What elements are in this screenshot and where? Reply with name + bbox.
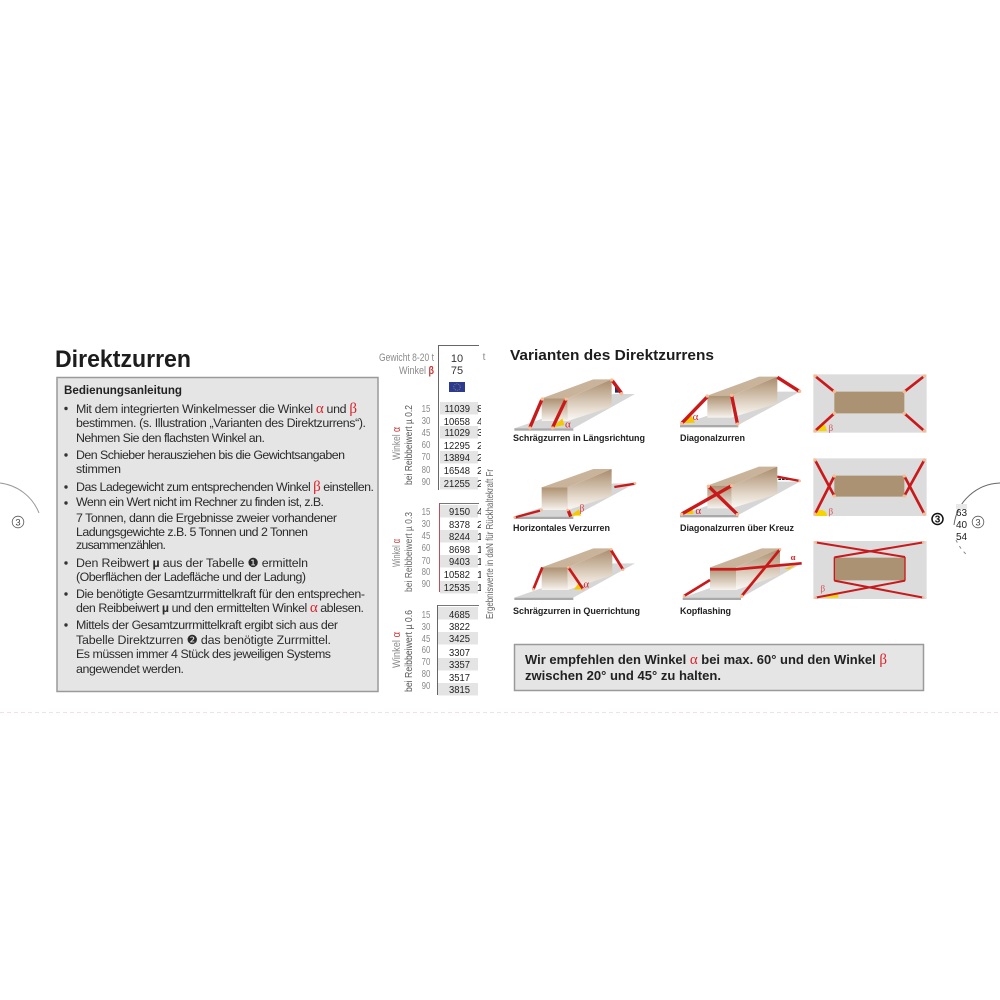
left dial edge: 3 (15, 518, 21, 528)
top view: Diagonalzurren: β (828, 424, 833, 434)
top view: Kopflashing: β (820, 585, 825, 595)
table: friction 0.2: 60 (422, 439, 430, 450)
heading: Varianten des Direktzurrens: Varianten des Direktzurrens (510, 347, 714, 364)
table: friction 0.2: 3 (477, 427, 483, 439)
rotated note: result values: Ergebniswerte in daN für Rückhaltekraft Fr (484, 469, 496, 619)
table: friction 0.3: 1 (477, 582, 483, 594)
calculator header labels: 75 (451, 365, 463, 377)
table: friction 0.2: Winkel α (391, 427, 403, 460)
table: friction 0.3: 8378 (449, 520, 470, 531)
diagram: Kopflashing: α (791, 552, 796, 562)
bullet list: Nehmen Sie den flachsten Winkel an. (76, 431, 265, 445)
table: friction 0.3: 1 (477, 544, 483, 556)
table: friction 0.6: 4685 (449, 610, 470, 621)
table: friction 0.6: 30 (422, 621, 430, 632)
table: friction 0.6: 3357 (449, 660, 470, 671)
table: friction 0.2: 15 (422, 403, 430, 414)
heading: Bedienungsanleitung: Bedienungsanleitung (64, 383, 182, 397)
table: friction 0.6: 3425 (449, 634, 470, 645)
table: friction 0.3: 1 (477, 556, 483, 568)
diagram: Diagonalzurren (680, 377, 801, 427)
top view: Diagonalzurren (813, 374, 927, 434)
caption: Schrägzurren in Längsrichtung: Schrägzurren in Längsrichtung (513, 433, 645, 443)
table: friction 0.6: 70 (422, 656, 430, 667)
table: friction 0.2: 10658 (444, 417, 470, 428)
diagram: Diagonalzurren: α (693, 411, 699, 423)
table: friction 0.2: 80 (422, 464, 430, 475)
caption: Diagonalzurren: Diagonalzurren (680, 433, 745, 443)
diagram: Schrägzurren in Längsrichtung: α (565, 418, 571, 430)
diagram: Kopflashing (683, 548, 802, 600)
bullet list: Ladungsgewichte z.B. 5 Tonnen und 2 Tonnen (76, 525, 308, 539)
right dial edge (954, 483, 1000, 556)
table: friction 0.2: 90 (422, 476, 430, 487)
calculator header labels (379, 346, 486, 377)
table: friction 0.3: bei Reibbeiwert µ 0.3 (403, 512, 415, 592)
marker: circled 3: 3 (935, 514, 941, 526)
panel: Bedienungsanleitung (57, 378, 378, 692)
table: friction 0.2: 4 (477, 416, 483, 428)
page divider (0, 712, 1000, 714)
bullet list: Mittels der Gesamtzurrmittelkraft ergibt sich aus der (76, 618, 338, 632)
table: friction 0.2: 11029 (444, 428, 470, 439)
top view: Diagonalzurren über Kreuz: β (828, 507, 833, 517)
table: friction 0.2: 70 (422, 451, 430, 462)
calculator header labels: Gewicht 8-20 t (379, 352, 434, 364)
table: friction 0.2: 2 (477, 452, 483, 464)
caption: Horizontales Verzurren: Horizontales Verzurren (513, 523, 610, 533)
table: friction 0.3: 10582 (444, 570, 470, 581)
table: friction 0.2: bei Reibbeiwert µ 0.2 (403, 405, 415, 485)
bullet list: Es müssen immer 4 Stück des jeweiligen Systems (76, 647, 331, 661)
table: friction 0.2: 16548 (444, 466, 470, 477)
bullet list: stimmen (76, 462, 121, 476)
caption: Kopflashing: Kopflashing (680, 606, 731, 616)
table: friction 0.2: 12295 (444, 441, 470, 452)
caption: Schrägzurren in Querrichtung: Schrägzurren in Querrichtung (513, 606, 640, 616)
table: friction 0.3: 80 (422, 566, 430, 577)
table: friction 0.6: Winkel α (391, 631, 403, 668)
table: friction 0.3: 4 (477, 506, 483, 518)
table: friction 0.3: 30 (422, 518, 430, 529)
table: friction 0.6: 15 (422, 609, 430, 620)
bullet list: Tabelle Direktzurren ❷ das benötigte Zurrmittel. (76, 633, 331, 647)
bullet list: Mit dem integrierten Winkelmesser die Winkel α und β (76, 401, 357, 417)
right dial edge: 54 (956, 532, 968, 543)
table: friction 0.3: 8698 (449, 545, 470, 556)
bullet list: Die benötigte Gesamtzurrmittelkraft für den entsprechen- (76, 587, 365, 601)
table: friction 0.3: 90 (422, 578, 430, 589)
diagram: Diagonalzurren über Kreuz: α (695, 505, 701, 517)
table: friction 0.3: 60 (422, 542, 430, 553)
bullet list: angewendet werden. (76, 662, 184, 676)
table: friction 0.3: 9150 (449, 507, 470, 518)
table: friction 0.3: 1 (477, 569, 483, 581)
table: friction 0.6: 45 (422, 633, 430, 644)
bullet list: Wenn ein Wert nicht im Rechner zu finden ist, z.B. (76, 495, 324, 509)
table: friction 0.3 (391, 503, 483, 594)
table: friction 0.6: 90 (422, 680, 430, 691)
table: friction 0.3: 1 (477, 531, 483, 543)
table: friction 0.2: 2 (477, 440, 483, 452)
table: friction 0.2: 45 (422, 427, 430, 438)
table: friction 0.6: 3822 (449, 622, 470, 633)
table: friction 0.2: 21255 (444, 479, 470, 490)
table: friction 0.3: 12535 (444, 583, 470, 594)
table: friction 0.2: 8 (477, 403, 483, 415)
table: friction 0.3: 8244 (449, 532, 470, 543)
table: friction 0.6: 60 (422, 644, 430, 655)
bullet list: zusammenzählen. (76, 538, 166, 552)
table: friction 0.3: 15 (422, 506, 430, 517)
table: friction 0.2: 30 (422, 415, 430, 426)
bullet list: Den Schieber herausziehen bis die Gewichtsangaben (76, 448, 345, 462)
bullet list: den Reibbeiwert µ und den ermittelten Winkel α ablesen. (76, 600, 364, 616)
diagram: Schrägzurren in Querrichtung: α (583, 578, 589, 590)
diagram: Diagonalzurren über Kreuz (680, 467, 801, 517)
callout: angle recommendation (514, 644, 924, 690)
table: friction 0.3: 70 (422, 555, 430, 566)
right dial edge: 3 (975, 518, 981, 528)
callout: angle recommendation: zwischen 20° und 45° zu halten. (525, 668, 721, 683)
table: friction 0.6: 80 (422, 668, 430, 679)
top view: Diagonalzurren über Kreuz (813, 458, 927, 517)
bullet list: Das Ladegewicht zum entsprechenden Winkel β einstellen. (76, 479, 374, 495)
table: friction 0.6 (391, 605, 479, 696)
diagram: Horizontales Verzurren: β (579, 504, 584, 515)
diagram: Schrägzurren in Querrichtung (514, 548, 635, 600)
diagram: Horizontales Verzurren (513, 469, 636, 519)
table: friction 0.3: 45 (422, 530, 430, 541)
caption: Diagonalzurren über Kreuz: Diagonalzurren über Kreuz (680, 523, 794, 533)
table: friction 0.6: 3815 (449, 685, 470, 696)
calculator header labels: 10 (451, 353, 463, 365)
table: friction 0.6: 3307 (449, 648, 470, 659)
marker: circled 3 (932, 514, 943, 526)
callout: angle recommendation: Wir empfehlen den Winkel α bei max. 60° und den Winkel β (525, 652, 887, 668)
bullet list (64, 401, 374, 676)
table: friction 0.6: 3517 (449, 673, 470, 684)
top view: Kopflashing (813, 541, 927, 599)
calculator header labels: t (483, 352, 486, 363)
icon: EU flag (449, 382, 465, 392)
title: Direktzurren (55, 346, 191, 373)
right dial edge: 40 (956, 520, 968, 531)
table: friction 0.2: 11039 (444, 404, 470, 415)
bullet list: 7 Tonnen, dann die Ergebnisse zweier vorhandener (76, 511, 337, 525)
table: friction 0.2 (391, 346, 483, 490)
right dial edge: 63 (956, 508, 968, 519)
table: friction 0.2: 13894 (444, 453, 470, 464)
table: friction 0.3: 2 (477, 519, 483, 531)
table: friction 0.2: 2 (477, 478, 483, 490)
calculator header labels: Winkel β (399, 365, 434, 377)
table: friction 0.3: Winkel α (391, 539, 403, 567)
bullet list: Den Reibwert µ aus der Tabelle ❶ ermitteln (76, 556, 308, 570)
table: friction 0.6: bei Reibbeiwert µ 0.6 (403, 610, 415, 692)
table: friction 0.2: 2 (477, 465, 483, 477)
diagram: Schrägzurren in Längsrichtung (514, 378, 635, 431)
bullet list: (Oberflächen der Ladefläche und der Ladung) (76, 570, 306, 584)
left dial edge (0, 483, 39, 528)
bullet list: bestimmen. (s. Illustration „Varianten des Direktzurrens“). (76, 416, 366, 430)
table: friction 0.3: 9403 (449, 557, 470, 568)
